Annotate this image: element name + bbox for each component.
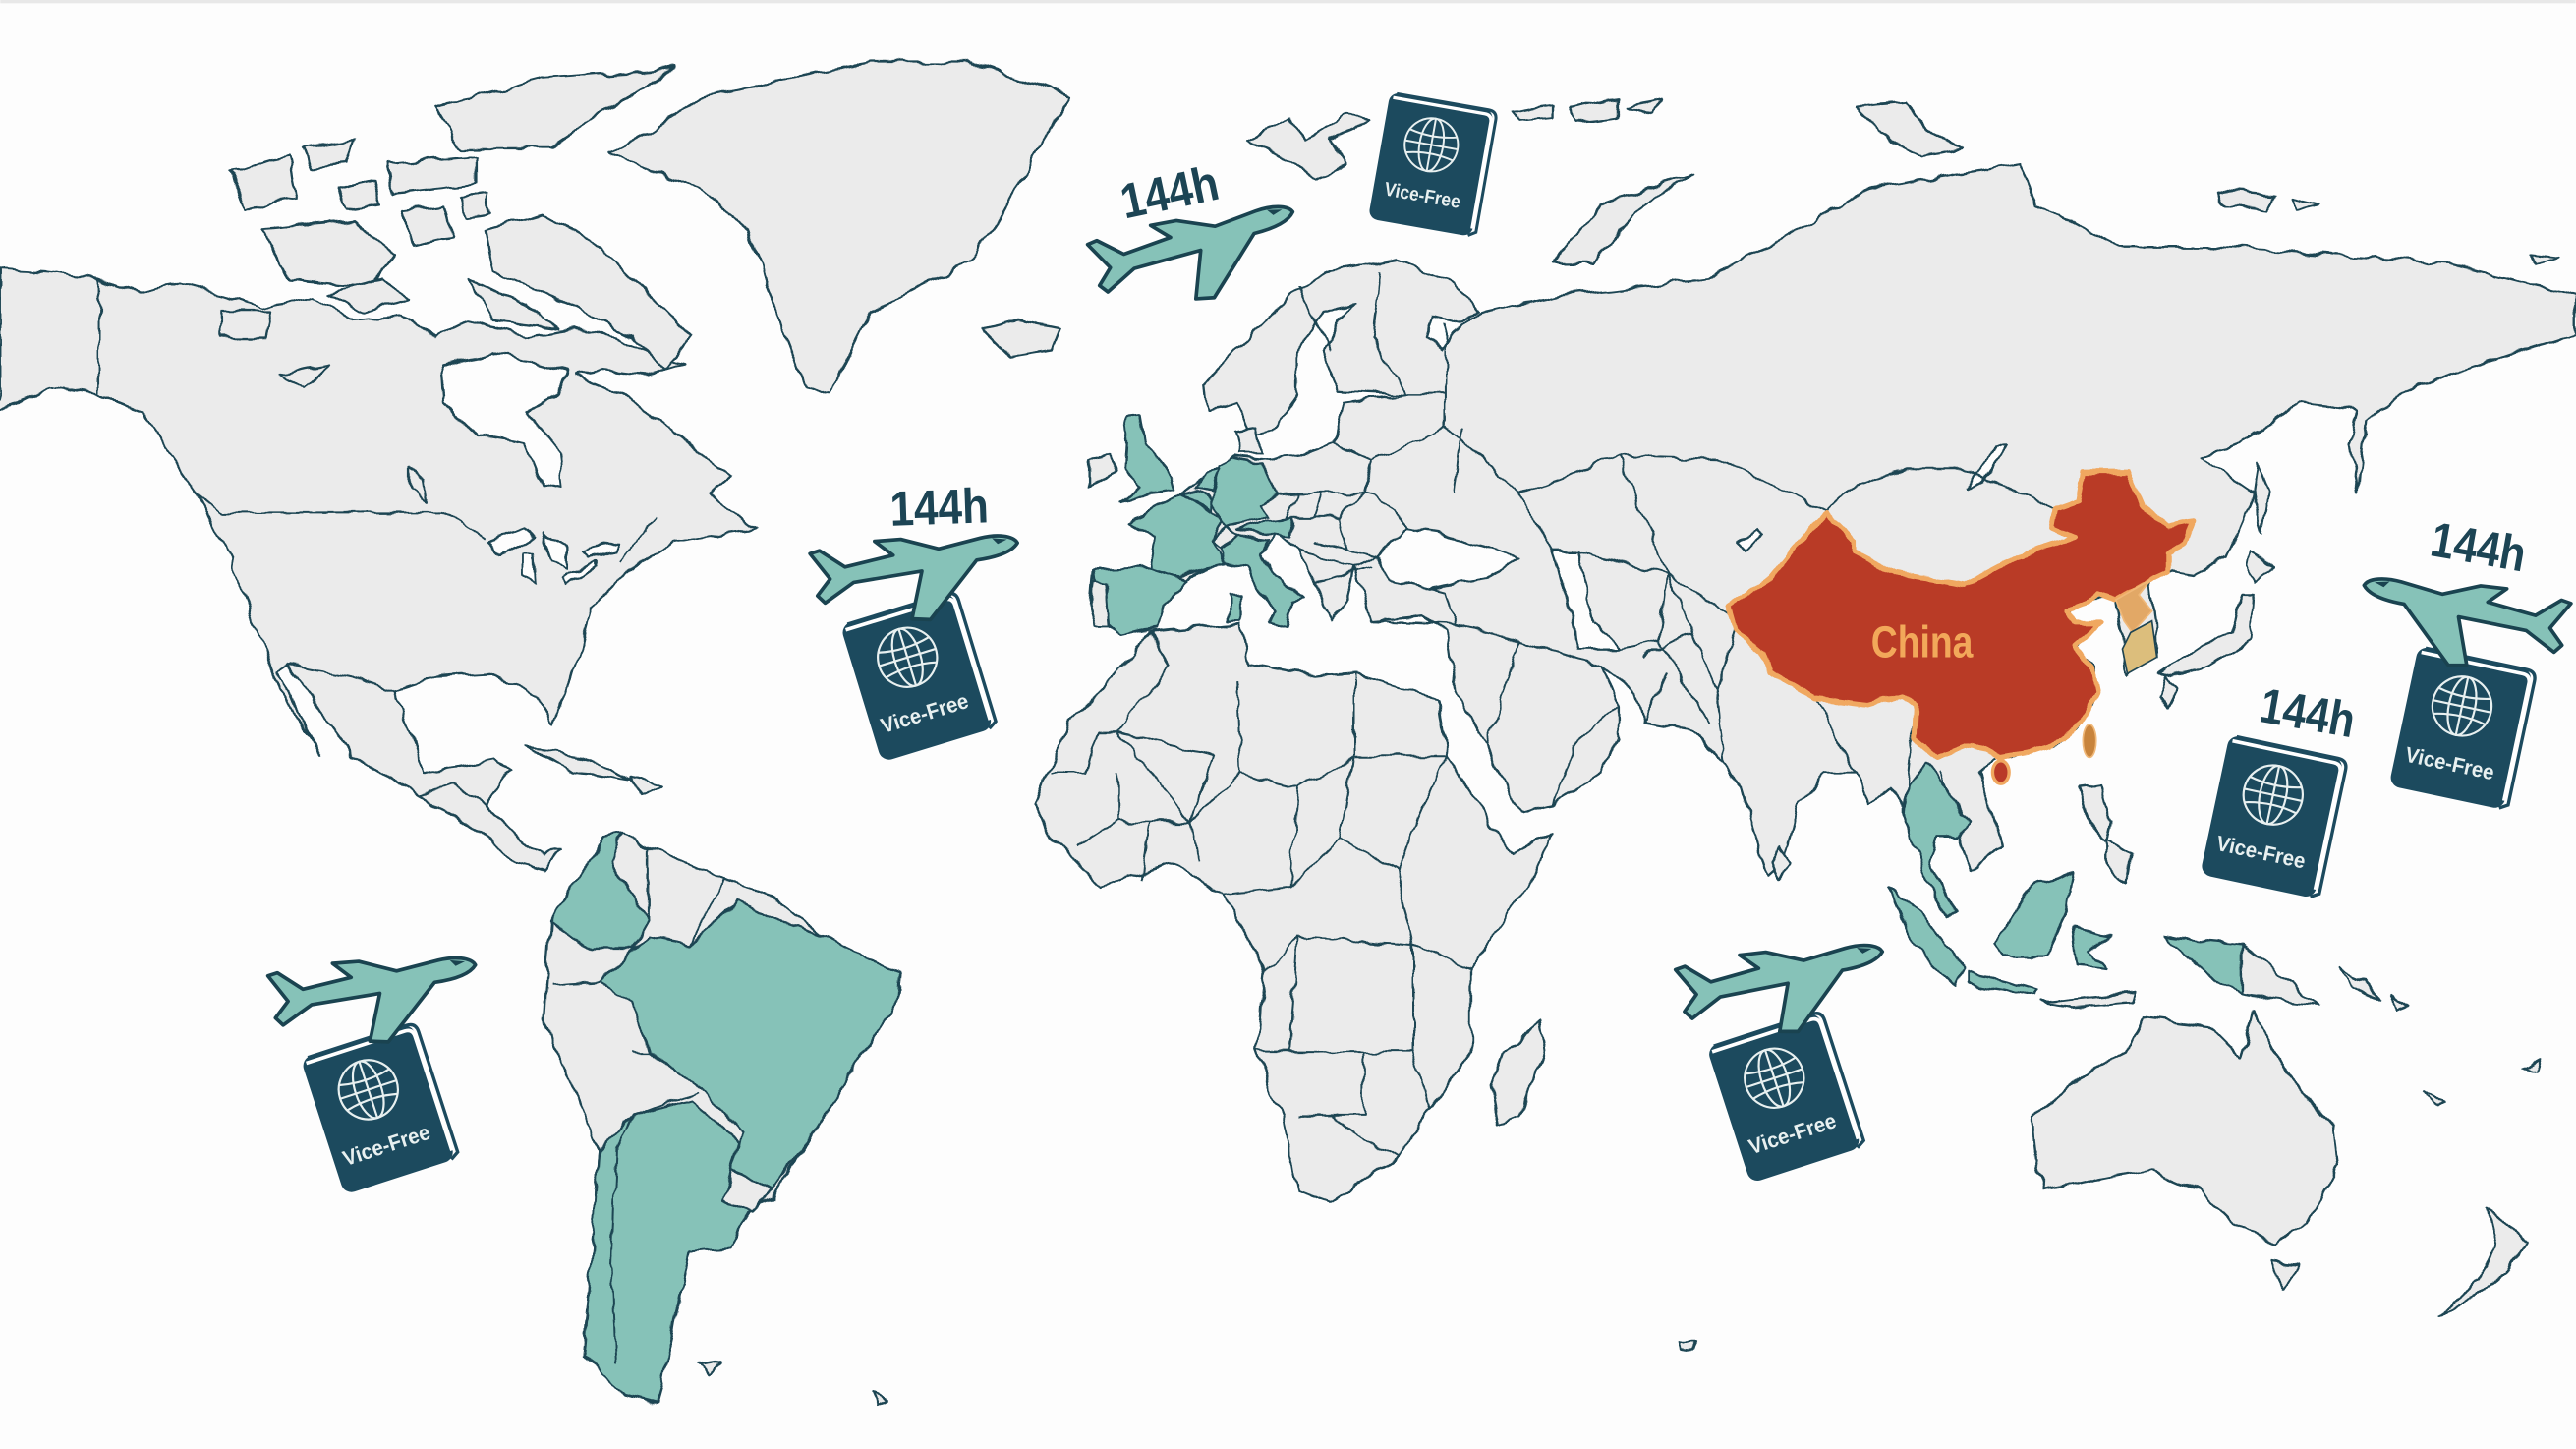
label: Vice-Free: Vice-Free <box>2214 831 2308 873</box>
map: Eurasia <box>1088 98 2576 1106</box>
label: Vice-Free: Vice-Free <box>1746 1108 1839 1159</box>
Hudson Bay <box>440 353 567 488</box>
passport South America <box>302 1022 459 1193</box>
plane Indian Ocean <box>1675 931 1894 1051</box>
passport Pacific <box>2390 647 2537 810</box>
map: Africa <box>1035 624 1553 1202</box>
label: Vice-Free: Vice-Free <box>878 688 971 738</box>
plane Pacific <box>2353 564 2571 684</box>
Uruguay <box>723 1170 773 1211</box>
islands: Japan <box>2158 463 2275 710</box>
South Korea <box>2122 621 2157 673</box>
label: 144h right lower: 144h <box>2256 677 2360 748</box>
map: North America <box>0 69 756 871</box>
passport right lower <box>2201 735 2348 898</box>
map: Iceland <box>983 320 1059 357</box>
plane South America <box>267 944 485 1057</box>
plane Atlantic <box>810 522 1026 635</box>
map: Australia and New Zealand <box>1679 1011 2527 1352</box>
Black Sea <box>1377 529 1519 588</box>
Brazil <box>600 900 898 1191</box>
label: Vice-Free: Vice-Free <box>340 1120 433 1171</box>
passport Indian Ocean <box>1707 1011 1865 1183</box>
plane top <box>1087 192 1308 324</box>
passport Atlantic <box>841 591 998 761</box>
map: Southeast Asia teal <box>1889 764 2540 1106</box>
label: 144h Atlantic: 144h <box>889 478 990 537</box>
Chile and Argentina <box>584 1101 753 1405</box>
Western Europe teal <box>1088 414 1304 636</box>
label: Vice-Free: Vice-Free <box>2403 742 2496 784</box>
label: China: China <box>1871 616 1974 667</box>
North Korea <box>2116 580 2152 632</box>
Caspian Sea <box>1553 551 1618 649</box>
map: South America <box>543 835 898 1405</box>
label: 144h top: 144h <box>1116 155 1224 229</box>
map: China <box>1728 472 2193 783</box>
map: Greenland <box>611 63 1071 394</box>
label: Vice-Free: Vice-Free <box>1383 179 1462 213</box>
label: 144h Pacific: 144h <box>2427 511 2530 582</box>
passport group top <box>1369 92 1497 237</box>
Colombia <box>550 835 649 950</box>
